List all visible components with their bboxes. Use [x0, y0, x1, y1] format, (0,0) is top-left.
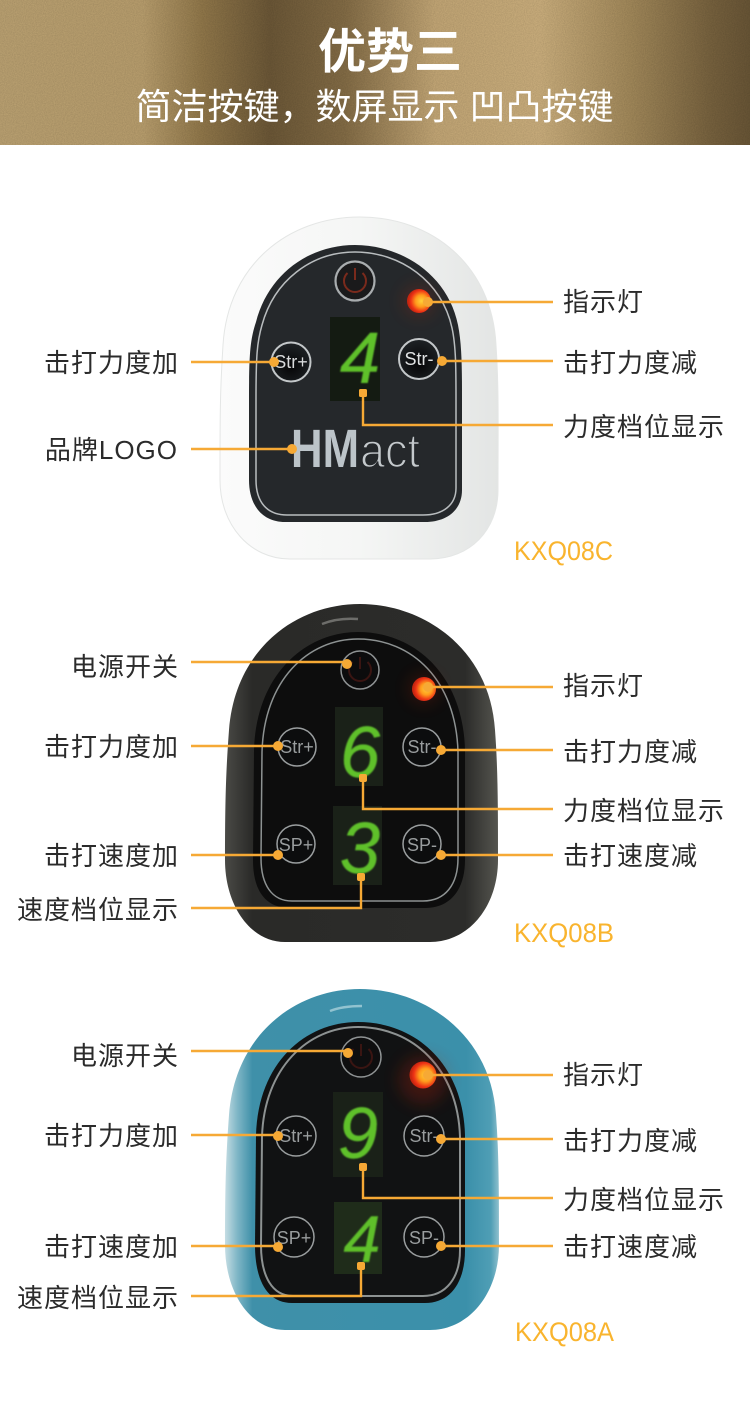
- Str- button: Str-: [404, 349, 434, 369]
- labels: [44, 287, 725, 465]
- SP+ button: SP+: [279, 835, 313, 855]
- Str+ button: Str+: [274, 352, 308, 372]
- model name: KXQ08B: [514, 918, 614, 948]
- labels: 电源开关: [71, 652, 179, 682]
- SP- button: [403, 825, 441, 863]
- panel: KXQ08A blue controller: [17, 989, 725, 1347]
- subtitle: 简洁按键，数屏显示 凹凸按键: [135, 86, 614, 127]
- device body white: [220, 217, 498, 559]
- speed display: 4: [344, 1202, 380, 1276]
- top highlight: [322, 619, 358, 624]
- Str- button: Str-: [408, 737, 437, 757]
- SP- button: SP-: [407, 835, 437, 855]
- device body black: [225, 604, 498, 942]
- SP- button: SP-: [409, 1228, 439, 1248]
- Str- button: [403, 728, 441, 766]
- labels: 击打力度加: [44, 348, 179, 378]
- brand logo: act: [360, 425, 420, 478]
- labels: [17, 1041, 725, 1313]
- brand logo: [291, 419, 420, 479]
- panel: KXQ08B black controller: [17, 604, 725, 948]
- labels: 力度档位显示: [563, 796, 725, 826]
- indicator LED: [399, 1056, 447, 1104]
- top highlight: [330, 1006, 362, 1011]
- labels: 品牌LOGO: [45, 435, 178, 465]
- Str+ button: Str+: [279, 1126, 313, 1146]
- labels: 速度档位显示: [17, 1283, 179, 1313]
- Str+ button: [272, 342, 310, 382]
- title: 优势三: [318, 26, 462, 79]
- panel: KXQ08C white controller: [44, 217, 725, 566]
- labels: 指示灯: [563, 287, 644, 317]
- labels: [17, 652, 725, 925]
- labels: 击打力度减: [563, 348, 698, 378]
- speed display: 3: [340, 809, 380, 889]
- power button: [341, 651, 379, 689]
- face outline ring: [261, 639, 458, 901]
- SP- button: [404, 1217, 444, 1257]
- labels: 击打力度减: [563, 1126, 698, 1156]
- SP+ button: [277, 825, 315, 863]
- SP+ button: [274, 1217, 314, 1257]
- black control face: [255, 1022, 465, 1303]
- black control face: [249, 245, 462, 522]
- labels: 击打速度加: [44, 1232, 179, 1262]
- strength display: 6: [340, 713, 381, 793]
- labels: 电源开关: [71, 1041, 179, 1071]
- power button: [336, 262, 374, 300]
- model name: KXQ08A: [515, 1317, 614, 1347]
- model name: KXQ08C: [514, 536, 613, 566]
- face outline ring: [261, 1027, 460, 1296]
- Str- button: Str-: [410, 1126, 439, 1146]
- strength display: 4: [340, 319, 380, 399]
- Str+ button: Str+: [280, 737, 314, 757]
- callout lines: [191, 659, 553, 908]
- brand logo: HM: [291, 419, 359, 479]
- SP+ button: SP+: [277, 1228, 311, 1248]
- labels: 击打力度减: [563, 737, 698, 767]
- labels: 击打力度加: [44, 1121, 179, 1151]
- header banner: [0, 0, 750, 145]
- power button: [341, 1037, 381, 1077]
- labels: 速度档位显示: [17, 895, 179, 925]
- device body blue: [225, 989, 499, 1330]
- callout lines: [191, 297, 553, 454]
- labels: 击打力度加: [44, 732, 179, 762]
- labels: 击打速度减: [563, 1232, 698, 1262]
- labels: 击打速度减: [563, 841, 698, 871]
- labels: 力度档位显示: [563, 412, 725, 442]
- Str- button: [399, 339, 439, 379]
- callout lines: [191, 1048, 553, 1296]
- labels: 指示灯: [563, 671, 644, 701]
- Str+ button: [278, 728, 316, 766]
- indicator LED: [403, 285, 435, 317]
- labels: 击打速度加: [44, 841, 179, 871]
- Str+ button: [276, 1116, 316, 1156]
- face outline ring: [256, 252, 456, 515]
- indicator LED: [409, 674, 439, 704]
- labels: 指示灯: [563, 1060, 644, 1090]
- Str- button: [404, 1116, 444, 1156]
- strength display: 9: [338, 1094, 378, 1174]
- labels: 力度档位显示: [563, 1185, 725, 1215]
- black control face: [253, 632, 465, 908]
